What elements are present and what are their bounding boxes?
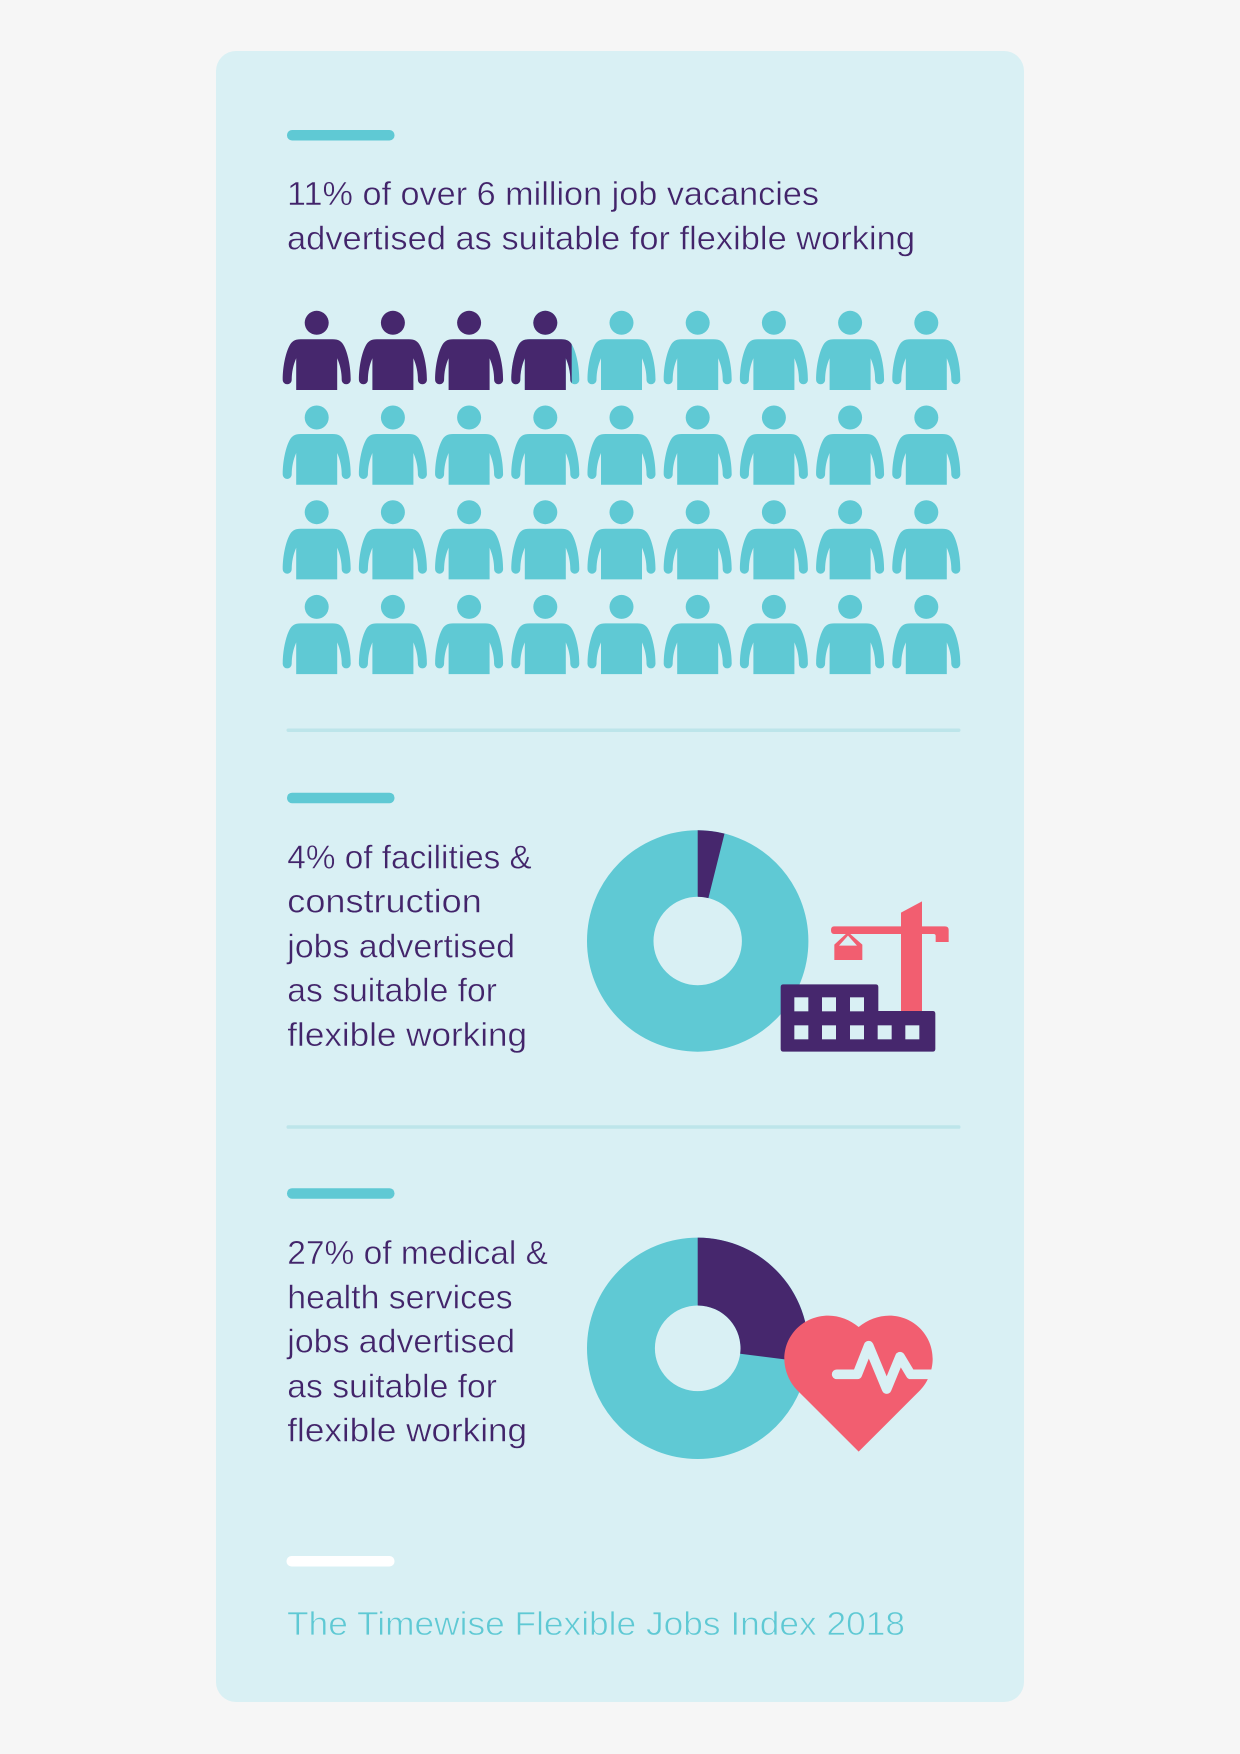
accent bar: section 1 — [287, 130, 394, 140]
heading: 11% of job vacancies: 11% of over 6 million job vacancies — [287, 175, 819, 212]
accent bar: footer — [286, 1556, 394, 1566]
heading: 11% of job vacancies: advertised as suitable for flexible working — [287, 220, 915, 256]
accent bar: section 2 — [287, 793, 394, 803]
text: 4% of facilities and construction: 4% of facilities & — [287, 838, 532, 875]
text: 27% of medical and health services: 27% of medical & — [287, 1234, 548, 1271]
text: 27% of medical and health services: jobs advertised — [286, 1323, 515, 1360]
icon: heart with pulse — [784, 1316, 934, 1452]
row 2 of people — [283, 406, 960, 485]
crane — [831, 901, 949, 1013]
text: 4% of facilities and construction — [286, 838, 532, 1053]
row 3 of people — [283, 500, 960, 579]
pictogram: 36 people, 4 highlighted — [283, 311, 960, 674]
donut chart: 4% — [620, 830, 775, 1018]
icon: crane and building — [781, 901, 949, 1052]
text: 4% of facilities and construction: construction — [287, 883, 482, 920]
text: 27% of medical and health services: as suitable for — [287, 1367, 497, 1404]
heading: 11% of job vacancies — [287, 175, 915, 256]
row 1 of people — [283, 311, 960, 390]
building — [781, 984, 935, 1052]
text: 4% of facilities and construction: as suitable for — [287, 972, 497, 1009]
donut chart: 27% — [621, 1238, 808, 1425]
accent bar: section 3 — [287, 1188, 394, 1199]
row 4 of people — [283, 595, 960, 674]
text: 27% of medical and health services: flexible working — [287, 1412, 527, 1449]
text: 27% of medical and health services — [286, 1234, 548, 1449]
text: 27% of medical and health services: health services — [287, 1278, 513, 1315]
panel: background card — [216, 51, 1024, 1702]
text: 4% of facilities and construction: jobs advertised — [286, 927, 515, 964]
text: 4% of facilities and construction: flexible working — [287, 1016, 527, 1053]
footer: source: The Timewise Flexible Jobs Index 2018 — [287, 1605, 905, 1642]
